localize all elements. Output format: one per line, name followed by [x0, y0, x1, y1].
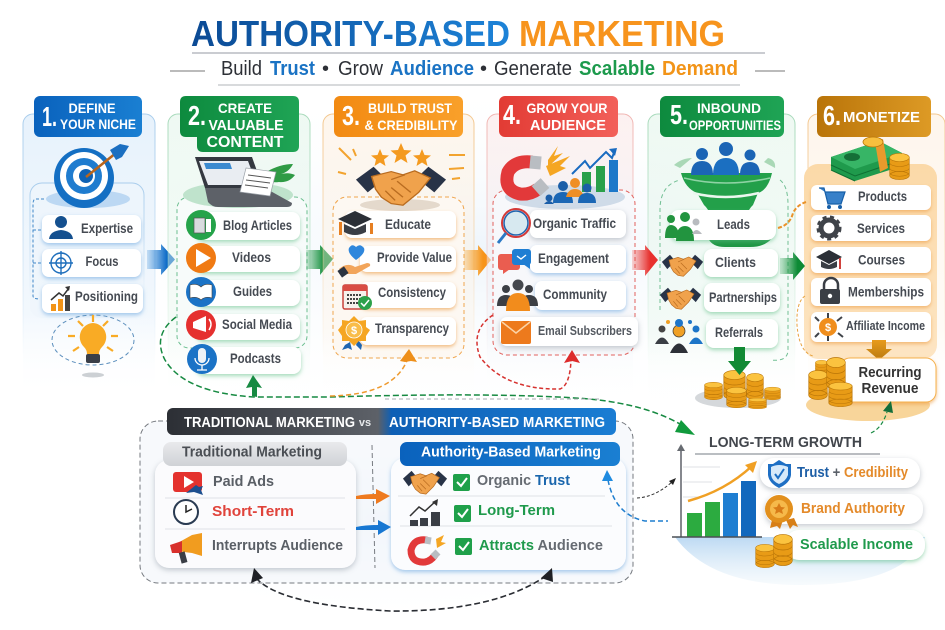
- heading: step 3: BUILD TRUST: [368, 100, 452, 116]
- row: educate: [338, 211, 456, 238]
- arrow: step 5 to 6: [780, 252, 805, 280]
- bar chart: [672, 444, 762, 537]
- row: engagement: Engagement: [538, 250, 609, 266]
- row: social media: [186, 310, 300, 340]
- row: clients: Clients: [715, 254, 756, 270]
- row: videos: [186, 243, 300, 273]
- row: social media: Social Media: [222, 316, 292, 332]
- row: consistency: [343, 282, 456, 310]
- callout: recurring revenue: Revenue: [862, 380, 918, 397]
- arrow: step 3 to 4: [464, 245, 491, 276]
- subtitle: Grow: [338, 58, 384, 80]
- heading: step 5: [660, 96, 784, 137]
- row: transparency: [338, 316, 456, 350]
- row: products: Products: [858, 188, 907, 204]
- heading: step 6: 6.: [823, 100, 841, 131]
- icon: target with arrow: [46, 144, 130, 208]
- row: referrals: Referrals: [715, 324, 763, 340]
- row: podcasts: Podcasts: [230, 350, 281, 366]
- row: memberships: [811, 278, 931, 306]
- row: trust + credibility: [760, 458, 920, 488]
- panel: traditional marketing: Traditional Marketing: [182, 444, 322, 460]
- icon: cash and coins: [831, 137, 909, 181]
- subtitle: Demand: [662, 58, 738, 80]
- arrow: step 1 to 2: [147, 244, 175, 275]
- dashed flow: orange to credibility: [330, 349, 417, 396]
- row: community: [497, 280, 626, 311]
- row: scalable income: [756, 530, 925, 568]
- row: short-term: Short-Term: [212, 503, 294, 520]
- row: guides: [186, 277, 300, 307]
- dashed connector: leads to products: [778, 202, 806, 228]
- callout: recurring revenue: Recurring: [858, 364, 922, 381]
- row: paid ads: Paid Ads: [213, 473, 274, 490]
- heading: step 3: 3.: [342, 100, 360, 131]
- row: long-term: Long-Term: [478, 502, 555, 519]
- arrow: black dashed to growth chart: [637, 478, 676, 498]
- row: podcasts: [187, 344, 301, 374]
- panel: traditional marketing: [155, 442, 356, 568]
- icon: coin pile: [695, 370, 781, 409]
- row: brand authority: Brand Authority: [801, 500, 906, 517]
- heading: step 6: [817, 96, 931, 137]
- row: blog articles: Blog Articles: [223, 217, 292, 233]
- panel: long-term growth: [672, 434, 925, 585]
- row: services: [811, 215, 931, 241]
- panel: authority-based marketing: [391, 442, 626, 570]
- row: partnerships: [660, 283, 780, 312]
- dashed flow: green to recurring revenue: [871, 401, 893, 433]
- arrow: black double-headed curve: [251, 568, 553, 611]
- row: clients: [662, 249, 778, 277]
- row: expertise: [42, 215, 141, 243]
- row: paid ads: [173, 472, 274, 495]
- panel: 2 create valuable content: [168, 96, 310, 399]
- row: products: [811, 185, 931, 210]
- heading: step 6: MONETIZE: [843, 109, 920, 126]
- row: long-term: [410, 499, 555, 526]
- heading: step 2: CONTENT: [206, 134, 284, 151]
- row: provide value: Provide Value: [377, 249, 452, 265]
- panel: authority-based marketing: Authority-Based Marketing: [421, 444, 601, 460]
- row: guides: Guides: [233, 283, 272, 299]
- row: email subscribers: Email Subscribers: [538, 323, 632, 338]
- title: MARKETING: [519, 13, 725, 54]
- row: engagement: [498, 245, 626, 274]
- panel: 5 inbound opportunities: [648, 96, 795, 409]
- row: provide value: [337, 245, 456, 278]
- row: interrupts audience: [170, 533, 343, 564]
- heading: step 3: [334, 96, 463, 137]
- heading: step 2: [180, 96, 299, 152]
- heading: step 4: GROW YOUR: [526, 100, 608, 116]
- row: community: Community: [543, 286, 607, 302]
- arrow: step 2 to 3: [306, 245, 333, 275]
- panel: comparison: [140, 408, 633, 583]
- heading: comparison banner: AUTHORITY-BASED MARKETING: [389, 414, 605, 431]
- callout: recurring revenue: [809, 357, 936, 407]
- heading: step 4: [499, 96, 618, 137]
- heading: step 3: & CREDIBILITY: [364, 117, 458, 133]
- subtitle: Trust: [270, 58, 315, 80]
- row: trust + credibility: Trust + Credibility: [797, 464, 909, 481]
- heading: comparison banner: [167, 408, 616, 435]
- row: transparency: Transparency: [375, 320, 449, 336]
- row: referrals: [655, 319, 778, 353]
- panel: 6 monetize: [797, 96, 945, 421]
- panel: 3 build trust and credibility: [323, 96, 474, 399]
- dashed flow: grey connector: [385, 398, 600, 400]
- subtitle: Build: [221, 58, 262, 80]
- dashed connector: [33, 199, 44, 299]
- heading: step 1: 1.: [42, 101, 57, 132]
- heading: step 4: 4.: [503, 99, 521, 130]
- heading: step 2: 2.: [188, 100, 206, 131]
- row: focus: Focus: [86, 253, 119, 269]
- row: blog articles: [186, 210, 300, 240]
- arrow: down to coins: [728, 347, 751, 375]
- arrow: blue compare: [356, 520, 391, 535]
- row: leads: [665, 210, 776, 241]
- row: short-term: [174, 500, 294, 524]
- title: AUTHORITY-BASED: [191, 13, 510, 54]
- row: affiliate income: Affiliate Income: [846, 318, 925, 333]
- row: expertise: Expertise: [81, 220, 133, 236]
- row: leads: Leads: [717, 216, 750, 232]
- row: educate: Educate: [385, 216, 431, 232]
- row: memberships: Memberships: [848, 284, 924, 300]
- icon: handshake with stars: [338, 143, 465, 211]
- heading: step 2: VALUABLE: [208, 117, 284, 134]
- row: affiliate income: $: [825, 322, 831, 334]
- subtitle: [170, 58, 785, 85]
- dashed connector: [797, 296, 813, 356]
- panel: 1 define your niche: [23, 96, 155, 399]
- arrow: down to recurring revenue: [866, 340, 892, 360]
- row: organic traffic: [498, 209, 626, 243]
- row: scalable income: Scalable Income: [800, 536, 913, 553]
- row: positioning: Positioning: [75, 288, 138, 304]
- row: courses: [811, 247, 931, 273]
- subtitle: Scalable: [579, 58, 655, 80]
- row: organic traffic: Organic Traffic: [533, 215, 616, 231]
- row: focus: [42, 249, 141, 277]
- heading: comparison banner: TRADITIONAL MARKETING: [184, 414, 355, 431]
- title: [191, 13, 765, 54]
- row: transparency: $: [351, 325, 357, 337]
- icon: laptop with documents: [183, 157, 295, 208]
- subtitle: •: [322, 58, 329, 80]
- heading: step 5: OPPORTUNITIES: [689, 117, 781, 133]
- arrow: orange compare: [356, 489, 390, 504]
- dashed flow: green to long-term growth: [160, 317, 695, 435]
- row: organic trust: Organic Trust: [477, 472, 570, 489]
- heading: step 2: CREATE: [218, 100, 272, 116]
- row: videos: Videos: [232, 249, 271, 265]
- subtitle: Audience: [390, 58, 474, 80]
- row: brand authority: [765, 494, 923, 529]
- icon: magnet and growth chart: [505, 146, 625, 209]
- subtitle: •: [480, 58, 487, 80]
- heading: step 5: 5.: [670, 99, 688, 130]
- heading: step 1: YOUR NICHE: [60, 116, 136, 132]
- heading: comparison banner: vs: [359, 417, 371, 429]
- icon: people in funnel: [674, 142, 775, 247]
- heading: long-term growth: LONG-TERM GROWTH: [709, 434, 862, 451]
- row: consistency: Consistency: [378, 284, 446, 300]
- row: attracts audience: Attracts Audience: [479, 537, 603, 554]
- row: attracts audience: [411, 535, 603, 562]
- row: email subscribers: [500, 317, 638, 346]
- heading: step 4: AUDIENCE: [530, 117, 606, 134]
- heading: step 1: DEFINE: [68, 100, 116, 116]
- row: services: Services: [857, 220, 905, 236]
- subtitle: Generate: [494, 58, 572, 80]
- heading: step 5: INBOUND: [697, 100, 761, 116]
- row: interrupts audience: Interrupts Audience: [212, 537, 343, 554]
- row: organic trust: [403, 471, 570, 494]
- heading: step 1: [34, 96, 142, 137]
- dashed flow: red to audience: [477, 315, 580, 389]
- icon: light bulb: [52, 315, 134, 378]
- row: courses: Courses: [858, 252, 905, 268]
- arrow: step 4 to 5: [632, 245, 658, 276]
- row: positioning: [42, 284, 143, 313]
- row: affiliate income: [811, 312, 931, 342]
- panel: 4 grow your audience: [487, 96, 638, 399]
- row: partnerships: Partnerships: [709, 289, 777, 305]
- arrow: blue dashed to authority label: [602, 470, 668, 521]
